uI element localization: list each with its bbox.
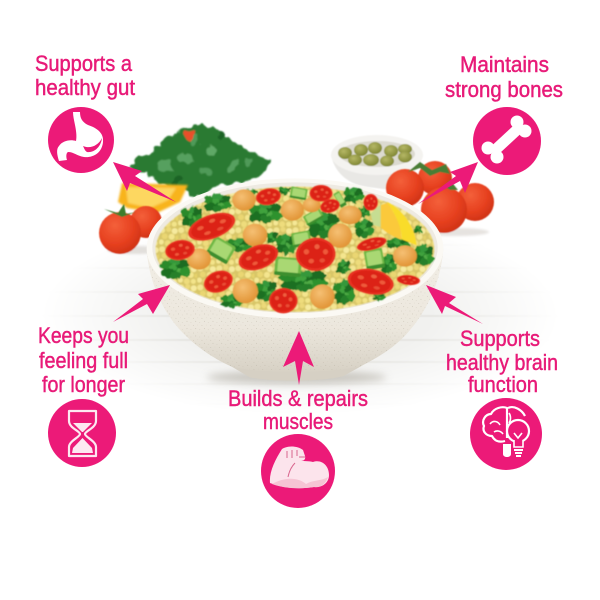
kale pieces: [160, 187, 434, 308]
bowl of couscous salad: [147, 178, 443, 384]
arrow: bowl to strong bones: [418, 162, 478, 204]
heading: builds and repairs muscles: muscles: [263, 409, 333, 434]
heading: keeps you feeling full for longer: feeling full: [39, 348, 128, 373]
arrow: bowl to brain function: [426, 285, 483, 324]
heading: supports healthy brain function: [446, 326, 558, 397]
wooden table background: [77, 266, 523, 386]
heading: keeps you feeling full for longer: [38, 323, 129, 397]
bowl shadow: [207, 371, 387, 384]
tomatoes left: [99, 204, 163, 254]
couscous base: [156, 187, 434, 312]
cucumber pieces: [206, 186, 385, 277]
bowl body: [147, 248, 443, 381]
icon: stomach: [48, 107, 114, 173]
salad contents: [156, 185, 434, 313]
tomato pieces: [163, 185, 420, 313]
icon: hourglass: [48, 399, 116, 467]
herbs behind the bowl: [130, 124, 273, 196]
heading: maintains strong bones: strong bones: [445, 77, 563, 102]
heading: supports healthy brain function: function: [468, 372, 538, 397]
olive bowl: [331, 135, 423, 190]
arrow: bowl to healthy gut: [113, 162, 176, 202]
heading: supports a healthy gut: [35, 51, 135, 100]
heading: builds and repairs muscles: [228, 386, 368, 434]
arrow: bowl to muscles: [283, 331, 314, 385]
heading: maintains strong bones: Maintains: [460, 52, 549, 77]
heading: keeps you feeling full for longer: for longer: [42, 372, 125, 397]
icon: brain and light bulb: [470, 398, 542, 470]
heading: maintains strong bones: [445, 52, 563, 102]
heading: supports healthy brain function: Supports: [460, 326, 540, 351]
tomatoes right: [386, 161, 494, 236]
orange slice: [118, 183, 188, 213]
heading: supports a healthy gut: Supports a: [35, 51, 133, 76]
bowl rim: [147, 178, 443, 318]
heading: supports healthy brain function: healthy brain: [446, 350, 558, 375]
lemon wedge: [371, 202, 417, 245]
heading: builds and repairs muscles: Builds & repairs: [228, 386, 368, 411]
arrow: bowl to feeling full: [113, 285, 170, 322]
icon: flexed arm: [261, 434, 335, 508]
heading: keeps you feeling full for longer: Keeps you: [38, 323, 129, 348]
heading: supports a healthy gut: healthy gut: [35, 75, 135, 100]
chickpeas: [187, 189, 417, 309]
icon: bone: [473, 107, 541, 175]
